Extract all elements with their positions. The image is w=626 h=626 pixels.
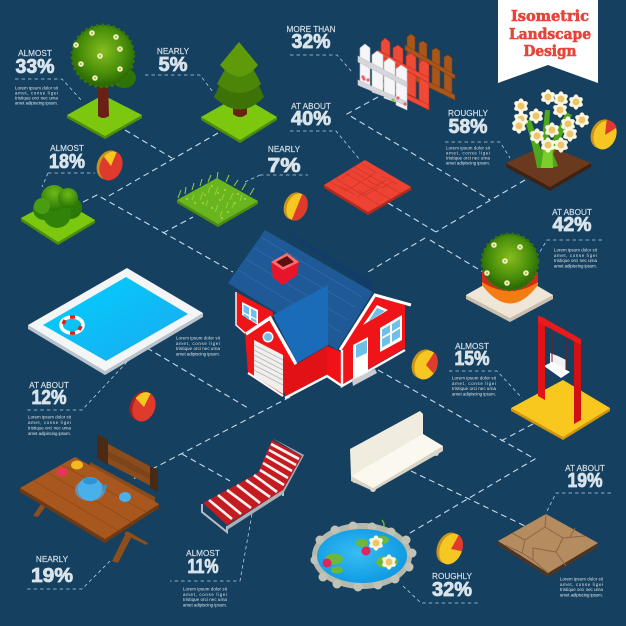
label: roughly 58%: ROUGHLY [448, 109, 488, 118]
label: almost 11%: 11% [188, 556, 219, 578]
text block: flowers: Lorem ipsum dolor sit [446, 146, 491, 150]
text block: lounger: amet adipiscing ipsum. [183, 602, 227, 607]
label: nearly 7% [268, 145, 301, 177]
text block: tree [15, 86, 59, 106]
picnic table with bench [20, 434, 159, 563]
text block: swing: tristique orci nec urna [452, 386, 497, 391]
sun lounger [202, 438, 304, 532]
text block: paving [560, 576, 604, 597]
title banner [498, 0, 598, 83]
label: almost 11%: ALMOST [186, 549, 220, 558]
text block: tree: amet, conse ligei [15, 90, 58, 96]
text block: flowers: amet, conse ligei [446, 150, 490, 156]
label: at about 12%: 12% [32, 387, 67, 409]
label: at about 19%: 19% [568, 470, 603, 492]
label: more than 32% [287, 25, 336, 53]
text block: pool [176, 336, 221, 356]
text block: planter [554, 248, 598, 268]
text block: tree: amet adipiscing ipsum. [15, 100, 58, 106]
label: nearly 5%: NEARLY [157, 47, 190, 56]
text block: table: amet adipiscing ipsum. [28, 431, 71, 436]
white bench [350, 411, 443, 492]
label: at about 19%: AT ABOUT [565, 464, 605, 473]
label: almost 33%: 33% [16, 56, 55, 78]
swing on sand [511, 316, 610, 440]
label: almost 18%: ALMOST [50, 144, 84, 153]
pie icon: 18 percent [92, 147, 127, 184]
label: nearly 7%: 7% [268, 155, 301, 177]
text block: tree: tristique orci nec urna [15, 96, 59, 100]
pie icon: 7 percent [280, 189, 312, 224]
label: at about 40%: AT ABOUT [291, 102, 331, 111]
grass patch [177, 172, 258, 227]
text block: planter: amet adipiscing ipsum. [554, 263, 597, 268]
text block: table: tristique orci nec urna [28, 426, 72, 430]
title banner: Landscape [509, 25, 591, 43]
text block: swing: amet, conse ligei [452, 381, 496, 386]
label: almost 33%: ALMOST [18, 49, 52, 58]
fence [358, 34, 455, 110]
pond [310, 520, 416, 592]
leafy tree on grass [67, 25, 142, 139]
swimming pool [28, 268, 203, 375]
label: at about 42%: 42% [552, 214, 592, 236]
label: almost 15%: 15% [454, 348, 490, 370]
text block: paving: amet, conse ligei [560, 582, 603, 587]
text block: paving: tristique orci nec urna [560, 587, 604, 592]
text block: pool: Lorem ipsum dolor sit [176, 336, 221, 340]
label: nearly 5%: 5% [158, 54, 188, 76]
label: roughly 58%: 58% [448, 116, 488, 138]
text block: pool: amet adipiscing ipsum. [176, 351, 220, 356]
title banner: Isometric [511, 7, 589, 25]
title banner: Design [524, 42, 577, 60]
text block: planter: Lorem ipsum dolor sit [554, 248, 598, 252]
label: nearly 19%: 19% [31, 565, 73, 587]
label: at about 12%: AT ABOUT [29, 381, 69, 390]
label: almost 18%: 18% [49, 151, 85, 173]
text block: table [28, 414, 72, 436]
text block: table: amet, conse ligei [28, 420, 71, 425]
text block: planter: tristique orci nec urna [554, 258, 598, 263]
label: nearly 19% [31, 555, 73, 587]
text block: flowers [446, 146, 491, 166]
text block: table: Lorem ipsum dolor sit [28, 414, 72, 420]
label: nearly 5% [157, 47, 190, 76]
stone paving [498, 514, 598, 577]
text block: flowers: amet adipiscing ipsum. [446, 160, 490, 166]
label: more than 32%: 32% [292, 31, 331, 53]
label: nearly 7%: NEARLY [268, 145, 301, 154]
house [228, 230, 411, 398]
text block: paving: amet adipiscing ipsum. [560, 592, 603, 597]
bush on grass [21, 185, 95, 245]
label: roughly 32%: 32% [432, 579, 472, 601]
label: more than 32%: MORE THAN [287, 25, 336, 34]
pie icon: 15 percent [407, 346, 442, 383]
text block: lounger: amet, conse ligei [183, 592, 227, 597]
spruce tree on grass [201, 42, 277, 143]
label: roughly 32%: ROUGHLY [432, 572, 472, 581]
pie icon: 12 percent [125, 388, 160, 425]
text block: pool: amet, conse ligei [176, 341, 220, 346]
label: almost 11% [186, 549, 220, 578]
flower bouquet [506, 89, 591, 191]
text block: pool: tristique orci nec urna [176, 346, 221, 351]
pie icon: 32 percent [432, 529, 467, 568]
pie icon: 58 percent [586, 116, 621, 153]
label: at about 42%: AT ABOUT [552, 208, 592, 217]
text block: swing: Lorem ipsum dolor sit [452, 376, 497, 380]
text block: lounger: Lorem ipsum dolor sit [183, 586, 228, 592]
text block: swing: amet adipiscing ipsum. [452, 391, 496, 396]
text block: flowers: tristique orci nec urna [446, 156, 491, 160]
brick patio [324, 160, 411, 215]
text block: tree: Lorem ipsum dolor sit [15, 86, 59, 90]
text block: planter: amet, conse ligei [554, 253, 597, 258]
text block: lounger: tristique orci nec urna [183, 597, 228, 602]
topiary planter [466, 234, 553, 322]
text block: swing [452, 376, 497, 396]
text block: paving: Lorem ipsum dolor sit [560, 576, 604, 582]
label: at about 40%: 40% [291, 108, 331, 130]
text block: lounger [183, 586, 228, 607]
label: nearly 19%: NEARLY [36, 555, 69, 564]
label: almost 15%: ALMOST [455, 342, 489, 351]
